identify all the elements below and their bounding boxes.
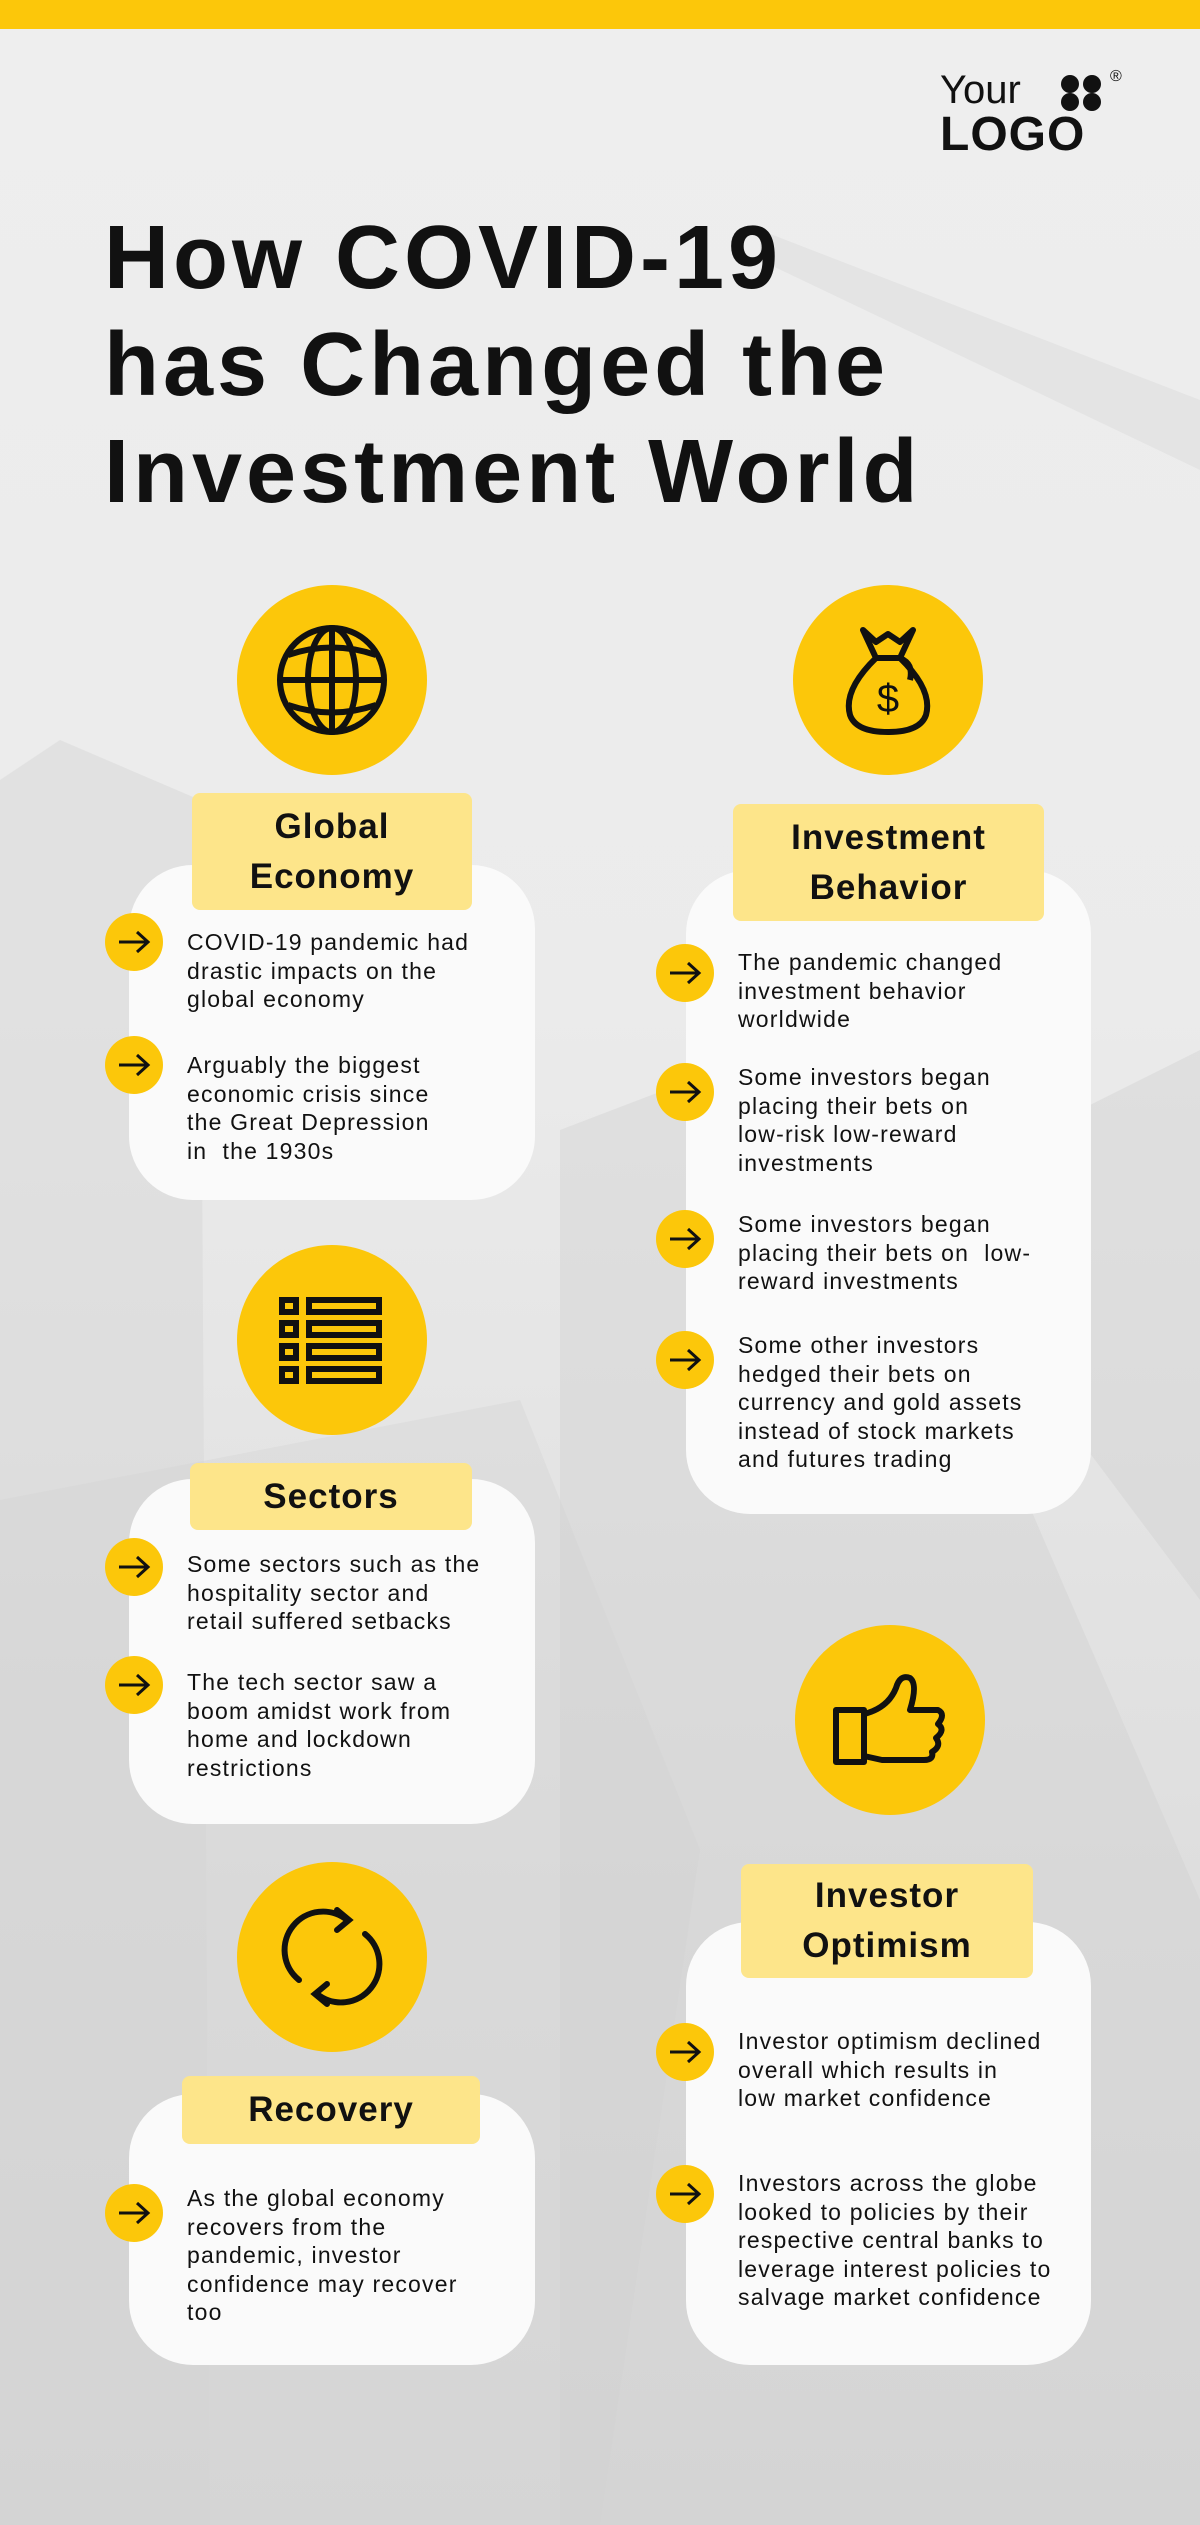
title: How COVID-19 <box>104 208 782 308</box>
bullet: S2: The tech sector saw a <box>187 1669 437 1695</box>
bullet: R1: pandemic, investor <box>187 2242 402 2268</box>
panel: global economy <box>129 865 535 1200</box>
icon: list <box>237 1245 427 1435</box>
bullet: GE2: economic crisis since <box>187 1080 430 1106</box>
bullet: GE1: COVID-19 pandemic had <box>187 929 469 955</box>
bullet: IB2: Some investors began <box>738 1064 991 1090</box>
panel: investment behavior <box>686 870 1091 1514</box>
logo: Your <box>940 68 1021 112</box>
bullet: IB3: Some investors began <box>738 1211 991 1237</box>
bullet: IO2 <box>656 2165 1052 2310</box>
bullet: IB1: The pandemic changed <box>738 949 1002 975</box>
bullet: GE2 <box>105 1036 430 1164</box>
title: Investment World <box>104 422 921 522</box>
logo <box>940 68 1122 161</box>
bullet: R1: recovers from the <box>187 2214 386 2240</box>
bullet: IB4: hedged their bets on <box>738 1360 972 1386</box>
heading: investor optimism <box>741 1864 1033 1978</box>
bullet: IB4: Some other investors <box>738 1332 979 1358</box>
heading: sectors <box>190 1463 472 1530</box>
panel: recovery <box>129 2094 535 2365</box>
heading: recovery <box>182 2076 480 2144</box>
bullet: S1: hospitality sector and <box>187 1580 429 1606</box>
bullet: R1: As the global economy <box>187 2185 445 2211</box>
title: has Changed the <box>104 315 889 415</box>
heading: investor optimism: Investor <box>815 1876 959 1915</box>
bullet: IB3 <box>656 1210 1031 1294</box>
heading: global economy: Economy <box>250 856 414 896</box>
title <box>104 208 921 522</box>
bullet: IB4: and futures trading <box>738 1446 953 1472</box>
bullet: GE2: in the 1930s <box>187 1138 334 1164</box>
bullet: IO1: overall which results in <box>738 2056 998 2082</box>
icon: globe <box>237 585 427 775</box>
heading: investment behavior: Investment <box>791 818 986 856</box>
bullet: IB1 <box>656 944 1002 1032</box>
bullet: S2: home and lockdown <box>187 1726 412 1752</box>
icon: money bag: $ <box>877 677 899 721</box>
bullet: IB2 <box>656 1063 991 1176</box>
bullet: R1: confidence may recover <box>187 2270 458 2296</box>
bullet: IB3: placing their bets on low- <box>738 1240 1031 1266</box>
bullet: S1 <box>105 1538 480 1634</box>
bullet: IB2: low-risk low-reward <box>738 1121 958 1147</box>
bullet: GE1 <box>105 913 469 1012</box>
bullet: S2 <box>105 1656 451 1780</box>
bullet: IO2: leverage interest policies to <box>738 2256 1052 2282</box>
bullet: IO2: looked to policies by their <box>738 2198 1029 2224</box>
bullet: IO2: salvage market confidence <box>738 2284 1042 2310</box>
heading: sectors: Sectors <box>263 1476 399 1516</box>
bullet: S2: boom amidst work from <box>187 1698 451 1724</box>
bullet: IB4: instead of stock markets <box>738 1418 1015 1444</box>
logo: LOGO <box>940 108 1085 161</box>
logo: ® <box>1110 68 1122 85</box>
bullet: IB2: investments <box>738 1150 874 1176</box>
top bar <box>0 0 1200 29</box>
heading: recovery: Recovery <box>248 2090 414 2129</box>
heading: global economy <box>192 793 472 910</box>
bullet: IO2: respective central banks to <box>738 2227 1044 2253</box>
bullet: S2: restrictions <box>187 1754 313 1780</box>
heading: investor optimism: Optimism <box>802 1926 972 1965</box>
bullet: IO2: Investors across the globe <box>738 2170 1038 2196</box>
bullet: IO1: low market confidence <box>738 2085 992 2111</box>
icon: refresh <box>237 1862 427 2052</box>
heading: investment behavior <box>733 804 1044 921</box>
bullet: R1: too <box>187 2299 223 2325</box>
bullet: IO1 <box>656 2023 1041 2111</box>
bullet: S1: Some sectors such as the <box>187 1551 480 1577</box>
bullet: IB4 <box>656 1331 1022 1472</box>
bullet: IB4: currency and gold assets <box>738 1389 1022 1415</box>
heading: investment behavior: Behavior <box>810 868 967 906</box>
bullet: IB2: placing their bets on <box>738 1092 969 1118</box>
panel: sectors <box>129 1479 535 1824</box>
bullet: S1: retail suffered setbacks <box>187 1608 452 1634</box>
bullet: IB1: worldwide <box>738 1006 851 1032</box>
bullet: GE2: the Great Depression <box>187 1109 430 1135</box>
bullet: GE1: global economy <box>187 986 365 1012</box>
bullet: GE1: drastic impacts on the <box>187 958 437 984</box>
bullet: IB3: reward investments <box>738 1268 959 1294</box>
bullet: R1 <box>105 2184 458 2325</box>
bullet: IB1: investment behavior <box>738 978 967 1004</box>
icon: money bag <box>793 585 983 775</box>
bullet: IO1: Investor optimism declined <box>738 2028 1041 2054</box>
heading: global economy: Global <box>275 806 389 846</box>
icon: thumbs up <box>795 1625 985 1815</box>
panel: investor optimism <box>686 1922 1091 2365</box>
bullet: GE2: Arguably the biggest <box>187 1052 421 1078</box>
